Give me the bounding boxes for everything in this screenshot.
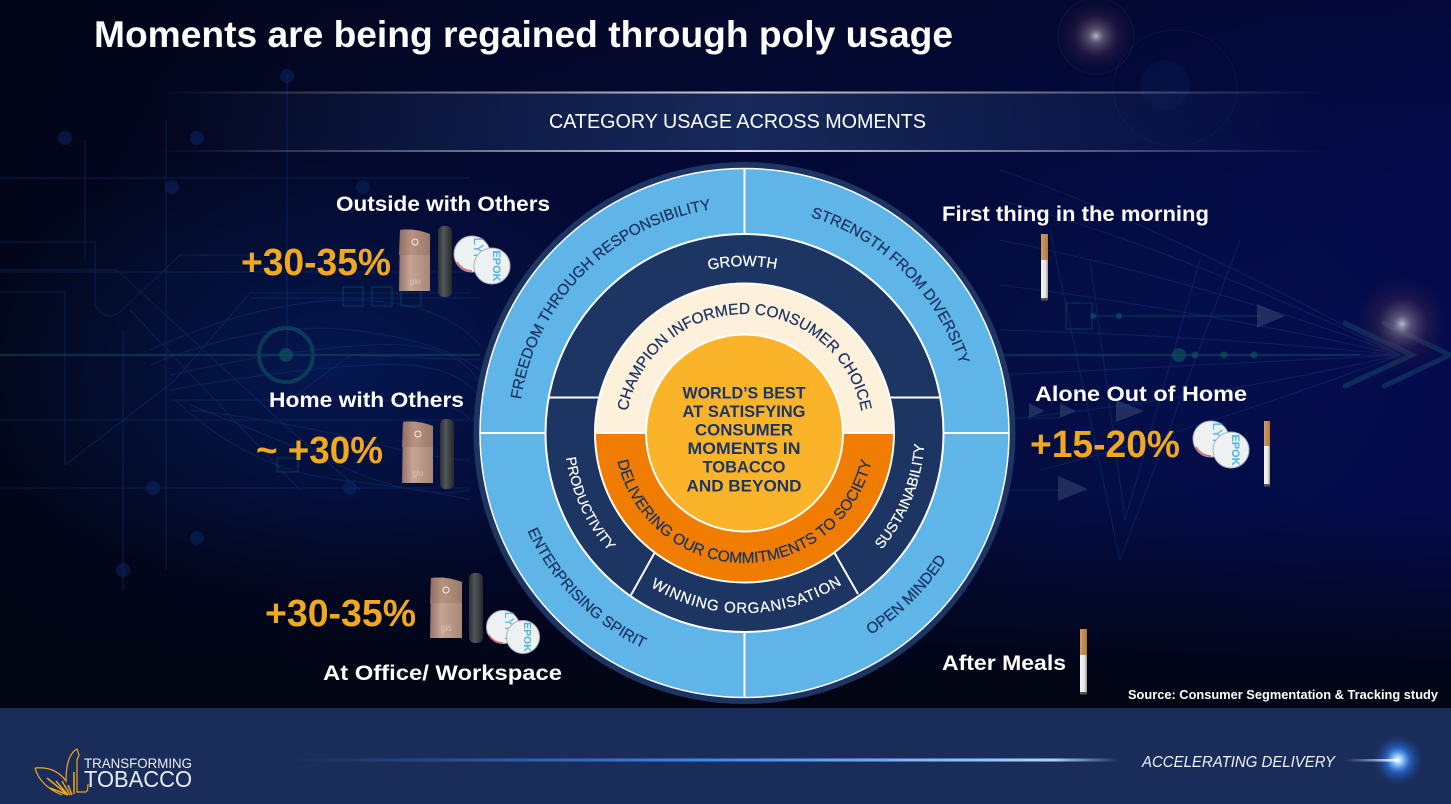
moment: first thing in the morning	[942, 203, 1209, 300]
icon: tobacco leaf	[35, 749, 88, 795]
icon: oral pouch tins	[486, 610, 540, 654]
moment: first thing in the morning: First thing in the morning	[942, 203, 1209, 226]
moment: alone out of home: Alone Out of Home	[1035, 383, 1247, 406]
centre statement: AT SATISFYING	[682, 402, 806, 421]
concentric strategy wheel	[474, 162, 1016, 704]
moment: outside with others	[241, 193, 550, 297]
icon: heated device	[399, 230, 430, 291]
icon: heated device	[402, 422, 433, 483]
icon: oral pouch tins	[1193, 421, 1249, 468]
centre statement: AND BEYOND	[686, 476, 802, 496]
moment: home with others: Home with Others	[269, 389, 464, 412]
icon: cigarette	[1041, 234, 1048, 300]
banner: category usage across moments: CATEGORY USAGE ACROSS MOMENTS	[549, 111, 926, 133]
icon: vape device	[438, 226, 452, 297]
footer light streak	[290, 758, 1120, 762]
strapline: accelerating delivery: ACCELERATING DELIVERY	[1141, 754, 1337, 771]
icon: heated device: glo	[413, 469, 424, 478]
moment: home with others: ~ +30%	[256, 430, 383, 472]
centre statement: MOMENTS IN	[688, 439, 800, 458]
ring label: open minded: OPEN MINDED	[867, 556, 944, 633]
icon: oral pouch tins: LYFT	[1210, 422, 1226, 456]
orange lower half ring	[595, 433, 894, 582]
moment: at office / workspace: At Office/ Workspace	[323, 662, 562, 685]
ring label: champion informed consumer choice: CHAMPION INFORMED CONSUMER CHOICE	[618, 302, 872, 411]
ring label: strength from diversity: STRENGTH FROM DIVERSITY	[812, 208, 970, 362]
logo: transforming tobacco	[35, 749, 192, 795]
ring label: productivity: PRODUCTIVITY	[566, 457, 616, 548]
footer star flare	[1344, 733, 1425, 787]
icon: heated device: glo	[410, 277, 421, 286]
footer band	[0, 708, 1451, 804]
icon: oral pouch tins: EPOK	[1229, 434, 1241, 466]
ring label: freedom through responsibility: FREEDOM THROUGH RESPONSIBILITY	[510, 198, 710, 398]
ring label: enterprising spirit: ENTERPRISING SPIRIT	[528, 527, 648, 647]
icon: vape device	[440, 419, 454, 489]
icon: cigarette	[1080, 629, 1087, 694]
ring label: growth: GROWTH	[708, 256, 777, 270]
icon: heated device: glo	[441, 624, 452, 633]
moment: at office / workspace	[265, 573, 562, 685]
centre statement: WORLD’S BEST	[682, 384, 806, 402]
icon: heated device	[430, 578, 462, 638]
icon: oral pouch tins: LYFT	[502, 612, 517, 642]
moment: outside with others: Outside with Others	[336, 193, 550, 216]
moment: after meals: After Meals	[942, 652, 1066, 675]
icon: oral pouch tins: LYFT	[471, 237, 487, 271]
ring label: winning organisation: WINNING ORGANISATION	[653, 576, 842, 614]
moment: at office / workspace: +30-35%	[265, 593, 416, 635]
ring label: delivering our commitments to society: DELIVERING OUR COMMITMENTS TO SOCIETY	[618, 458, 870, 564]
light blue values ring	[480, 168, 1009, 698]
banner: category usage across moments	[160, 92, 1330, 152]
navy enablers ring	[546, 234, 944, 632]
logo: transforming tobacco: TRANSFORMING	[84, 755, 192, 771]
moment: alone out of home: +15-20%	[1030, 424, 1180, 466]
icon: vape device	[469, 573, 483, 643]
logo: transforming tobacco: TOBACCO	[84, 766, 192, 792]
outer dark ring	[474, 162, 1016, 704]
cream upper half ring	[595, 284, 894, 433]
moment: home with others	[256, 389, 464, 489]
icon: oral pouch tins: EPOK	[521, 622, 533, 652]
centre statement: CONSUMER	[695, 420, 793, 440]
moment: alone out of home	[1030, 383, 1270, 486]
ring label: sustainability: SUSTAINABILITY	[876, 444, 924, 548]
moment: outside with others: +30-35%	[241, 242, 391, 284]
moment: after meals	[942, 629, 1087, 694]
icon: cigarette	[1264, 421, 1270, 486]
centre statement	[682, 384, 806, 496]
source note: Source: Consumer Segmentation & Tracking study	[1128, 687, 1439, 702]
title: Moments are being regained through poly usage	[94, 14, 953, 55]
icon: oral pouch tins: EPOK	[490, 250, 502, 282]
centre statement: TOBACCO	[702, 458, 786, 476]
icon: oral pouch tins	[454, 236, 510, 284]
gold centre circle	[646, 334, 843, 532]
